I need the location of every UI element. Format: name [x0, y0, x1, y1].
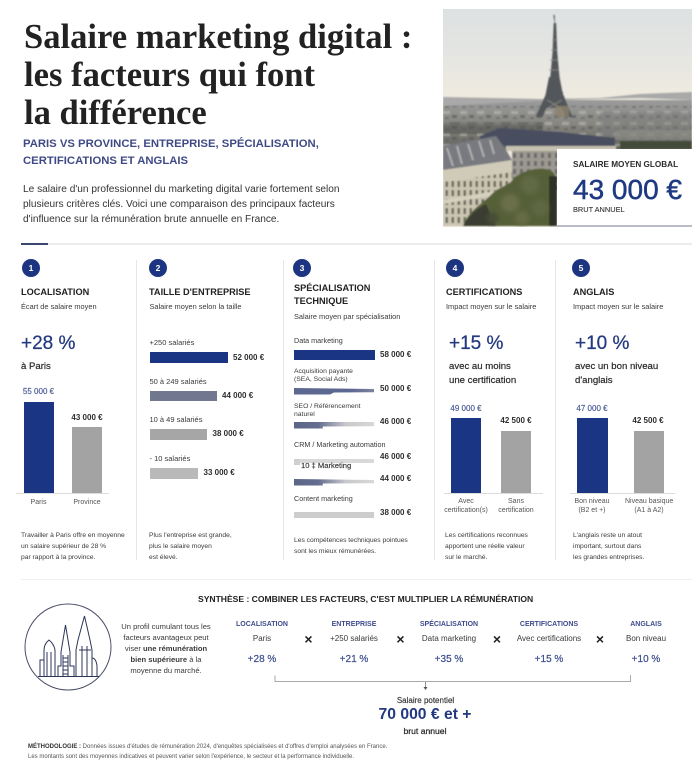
heading: TAILLE D'ENTREPRISE	[149, 287, 251, 297]
bar with	[451, 418, 481, 493]
label without	[498, 498, 534, 514]
synthesis text	[121, 622, 211, 675]
badge 5: 5	[579, 263, 583, 273]
subheading: Écart de salaire moyen	[21, 302, 97, 310]
factor percent: +35 %	[435, 654, 463, 665]
subheading: Salaire moyen selon la taille	[150, 302, 242, 310]
left haussmann building	[443, 136, 512, 178]
synthesis text: bien supérieure à la	[131, 655, 201, 664]
key figure caption: une certification	[449, 375, 516, 386]
note: est élevé.	[149, 554, 178, 560]
synthesis heading: SYNTHÈSE : COMBINER LES FACTEURS, C'EST MULTIPLIER LA RÉMUNÉRATION	[198, 594, 533, 604]
bar province	[72, 427, 102, 493]
note: un salaire supérieur de 28 %	[21, 542, 106, 550]
trees	[463, 169, 557, 226]
factor label: CERTIFICATIONS	[520, 621, 578, 628]
multiply sign: ×	[493, 630, 501, 646]
intro text: plusieurs critères clés. Voici une comparaison des principaux facteurs	[23, 198, 335, 210]
value Paris: 55 000 €	[23, 387, 54, 396]
key figure: +15 %	[449, 333, 503, 354]
badge 4: 4	[453, 263, 457, 273]
key figure: +28 %	[21, 333, 75, 354]
factor percent: +15 %	[535, 654, 563, 665]
note	[149, 532, 232, 560]
panel: synthèse	[24, 594, 666, 736]
label basic: Niveau basique	[625, 498, 673, 505]
bar second CRM	[294, 479, 374, 486]
heading: CERTIFICATIONS	[446, 287, 522, 297]
value 10-49: 38 000 €	[212, 429, 244, 438]
factor percent: +28 %	[248, 654, 276, 665]
label Paris: Paris	[31, 499, 46, 506]
value CRM: 46 000 €	[380, 452, 411, 461]
subtitle: CERTIFICATIONS ET ANGLAIS	[23, 155, 188, 167]
factor: localisation	[236, 621, 288, 665]
note: plus le salaire moyen	[149, 542, 212, 550]
methodology	[28, 742, 387, 760]
badge 5	[572, 259, 590, 277]
row 50-249: 50 à 249 salariés	[150, 377, 207, 386]
methodology: Les montants sont des moyennes indicatives et peuvent varier selon l'expérience, le secteur et la performance individuelle.	[28, 754, 354, 760]
title	[24, 18, 412, 132]
callout caption: BRUT ANNUEL	[573, 205, 625, 214]
multiply sign: ×	[304, 630, 313, 646]
label good	[574, 498, 610, 514]
potential salary	[379, 696, 471, 736]
subheading: Impact moyen sur le salaire	[446, 302, 536, 310]
bar acquisition	[294, 388, 374, 394]
row SEO: SEO / Référencement	[294, 403, 360, 410]
label basic	[625, 498, 673, 514]
row data marketing: Data marketing	[294, 336, 343, 345]
note: Travailler à Paris offre en moyenne	[21, 532, 125, 538]
factor: certifications	[516, 621, 581, 665]
value 50-249: 44 000 €	[222, 390, 253, 400]
note: apportent une réelle valeur	[445, 542, 525, 550]
title: les facteurs qui font	[24, 56, 315, 94]
value without: 42 500 €	[500, 416, 532, 425]
value +250: 52 000 €	[233, 352, 264, 362]
key figure: +10 %	[575, 333, 629, 354]
panel: spécialisation technique	[293, 259, 411, 554]
title: la différence	[24, 94, 207, 132]
intro text: d'influence sur la rémunération brute annuelle en France.	[23, 214, 279, 224]
intro text	[23, 184, 340, 224]
factor label: LOCALISATION	[236, 621, 288, 628]
salary callout	[557, 149, 692, 227]
multiply sign: ×	[396, 630, 405, 646]
row -10: - 10 salariés	[150, 454, 190, 462]
bar data marketing	[294, 350, 374, 360]
label province: Province	[73, 499, 101, 506]
value province: 43 000 €	[71, 413, 103, 422]
badge 4	[446, 259, 464, 277]
row acquisition: (SEA, Social Ads)	[294, 376, 348, 383]
factor value: Paris	[253, 634, 271, 642]
heading	[294, 282, 370, 306]
synthesis text: viser une rémunération	[125, 644, 207, 653]
label without: Sans	[508, 498, 524, 505]
row acquisition	[294, 368, 353, 383]
key figure caption	[449, 361, 516, 386]
synthesis text: moyenne du marché.	[130, 666, 202, 675]
factor: entreprise	[330, 621, 378, 665]
key figure caption: avec un bon niveau	[575, 361, 658, 372]
factor: spécialisation	[420, 620, 478, 665]
badge 3: 3	[300, 262, 304, 272]
note: Plus l'entreprise est grande,	[149, 532, 232, 538]
row +250: +250 salariés	[150, 338, 194, 347]
factor label: ANGLAIS	[630, 621, 662, 628]
bar 10-49	[150, 429, 207, 440]
subheading: Salaire moyen par spécialisation	[294, 312, 400, 320]
overlapping label: 10 ‡ Marketing	[301, 461, 351, 470]
note	[445, 532, 528, 560]
label with	[444, 498, 488, 514]
note: sur le marché.	[445, 554, 487, 560]
factor value: +250 salariés	[330, 634, 378, 642]
key figure caption: avec au moins	[449, 361, 511, 372]
factor value: Bon niveau	[626, 634, 666, 642]
value acquisition: 50 000 €	[380, 384, 411, 392]
heading: LOCALISATION	[21, 287, 89, 297]
photo illustration	[443, 9, 692, 227]
subheading: Impact moyen sur le salaire	[573, 302, 663, 310]
subtitle: PARIS VS PROVINCE, ENTREPRISE, SPÉCIALISATION,	[23, 138, 319, 150]
intro text: Le salaire d'un professionnel du marketing digital varie fortement selon	[23, 184, 340, 194]
value basic: 42 500 €	[632, 416, 664, 425]
factor value: Avec certifications	[517, 634, 581, 642]
bar chart: anglais	[570, 404, 675, 514]
title: Salaire marketing digital :	[24, 18, 412, 56]
panel: taille d'entreprise	[149, 259, 264, 560]
bar +250	[150, 352, 228, 363]
header rule	[21, 243, 692, 245]
label good: Bon niveau	[574, 498, 610, 505]
note	[294, 536, 408, 554]
bar SEO	[294, 422, 374, 428]
row content: Content marketing	[294, 494, 353, 503]
row SEO	[294, 403, 360, 418]
bar Paris	[24, 402, 54, 493]
note: important, surtout dans	[573, 542, 641, 550]
bar good	[577, 418, 608, 493]
value SEO: 46 000 €	[380, 417, 411, 426]
callout label: SALAIRE MOYEN GLOBAL	[573, 160, 678, 169]
panel: localisation	[16, 259, 125, 560]
factor value: Data marketing	[422, 634, 476, 642]
note	[21, 532, 125, 560]
factor: anglais	[626, 621, 666, 665]
potential value: 70 000 € et +	[379, 706, 471, 723]
heading: ANGLAIS	[573, 287, 614, 297]
key figure caption	[575, 361, 658, 386]
label good: (B2 et +)	[578, 507, 606, 514]
bracket and arrow	[274, 675, 631, 690]
heading: TECHNIQUE	[294, 296, 348, 306]
value data marketing: 58 000 €	[380, 350, 411, 358]
bar chart: certifications	[444, 404, 543, 514]
icon: skyline in circle	[24, 604, 112, 690]
label with: certification(s)	[444, 507, 488, 514]
potential label: Salaire potentiel	[397, 696, 454, 704]
bar chart: Paris vs province	[16, 387, 109, 506]
label without: certification	[498, 507, 534, 514]
key figure caption: d'anglais	[575, 375, 613, 386]
bar 50-249	[150, 391, 216, 401]
mid roofs	[480, 128, 615, 146]
bar CRM	[294, 459, 374, 462]
factor percent: +10 %	[632, 654, 660, 665]
subtitle	[23, 137, 319, 167]
note: Les certifications reconnues	[445, 532, 528, 538]
badge 3	[293, 258, 311, 276]
factor label: SPÉCIALISATION	[420, 621, 478, 628]
potential caption: brut annuel	[403, 726, 447, 736]
methodology: MÉTHODOLOGIE : Données issues d'études de rémunération 2024, d'enquêtes spécialisées et d'offres d'emploi analysées en France.	[28, 744, 387, 750]
badge 2	[149, 259, 167, 277]
multiply sign: ×	[596, 630, 604, 646]
label with: Avec	[458, 498, 474, 505]
glitch square	[294, 459, 300, 465]
key figure caption: à Paris	[21, 361, 51, 372]
note: par rapport à la province.	[21, 554, 95, 560]
value good: 47 000 €	[576, 404, 608, 412]
ranked bars	[294, 336, 411, 518]
label basic: (A1 à A2)	[634, 507, 664, 514]
Eiffel tower	[536, 15, 572, 117]
bar -10	[150, 468, 198, 478]
row acquisition: Acquisition payante	[294, 368, 353, 375]
badge 2: 2	[156, 263, 160, 273]
panel: certifications	[444, 259, 543, 560]
note: les grandes entreprises.	[573, 554, 644, 560]
row 10-49: 10 à 49 salariés	[150, 415, 202, 424]
bar basic	[634, 431, 664, 493]
note	[573, 532, 644, 560]
badge 1: 1	[29, 263, 33, 273]
horizontal bar chart	[150, 338, 264, 479]
row SEO: naturel	[294, 411, 315, 418]
row CRM: CRM / Marketing automation	[294, 440, 385, 449]
note: L'anglais reste un atout	[573, 532, 642, 538]
badge 1	[22, 259, 40, 277]
value -10: 33 000 €	[204, 468, 235, 477]
value with: 49 000 €	[450, 404, 482, 412]
factor percent: +21 %	[340, 654, 368, 665]
callout value: 43 000 €	[573, 174, 682, 205]
factor label: ENTREPRISE	[332, 621, 376, 628]
note: sont les mieux rémunérées.	[294, 548, 376, 554]
value second CRM: 44 000 €	[380, 474, 411, 482]
bar without	[500, 431, 530, 493]
bar content	[294, 512, 374, 518]
header photo: Paris and Eiffel Tower with global salary callout	[443, 9, 692, 227]
note: Les compétences techniques pointues	[294, 536, 408, 544]
value content: 38 000 €	[380, 508, 411, 517]
synthesis text: Un profil cumulant tous les	[121, 622, 211, 631]
heading: SPÉCIALISATION	[294, 283, 370, 293]
panel: anglais	[570, 259, 675, 560]
synthesis text: facteurs avantageux peut	[123, 633, 209, 642]
